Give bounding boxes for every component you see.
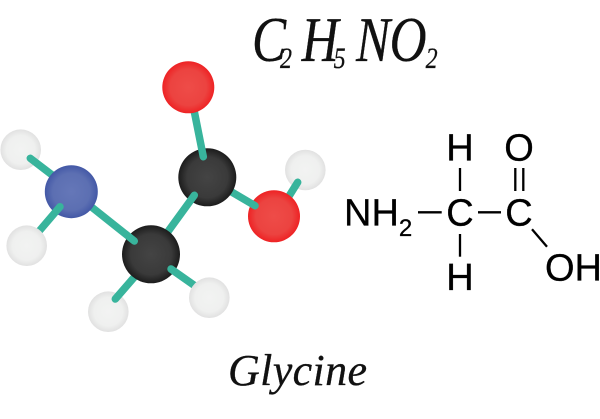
right lower hydrogen with bond: [171, 269, 230, 318]
title: molecular formula: 2: [426, 41, 438, 75]
hydroxyl group: hydrogen and oxygen: [230, 150, 326, 242]
lower hydrogen with bond: [88, 274, 137, 332]
nitrogen-carbon bond: [84, 201, 134, 241]
title: molecular formula: 2: [280, 41, 292, 75]
structural formula: [344, 128, 600, 299]
lower left hydrogen with bond: [6, 207, 60, 266]
upper left hydrogen with bond: [0, 129, 60, 181]
NH2 group: NH: [344, 193, 399, 235]
upper hydrogen label: H: [446, 128, 474, 170]
carboxyl carbon atom: [178, 148, 236, 206]
title: molecular formula: C: [252, 4, 287, 75]
alpha carbon label: C: [446, 193, 474, 235]
lower hydrogen label: H: [446, 257, 474, 299]
carboxyl carbon label: C: [505, 193, 533, 235]
oxygen label: O: [504, 128, 534, 170]
alpha carbon atom: [122, 225, 180, 283]
title: molecular formula: 5: [334, 41, 346, 75]
carbon-carbon bond: [164, 195, 194, 237]
nitrogen atom: [45, 165, 98, 218]
title: molecular formula: N: [355, 4, 393, 75]
caption: Glycine: Glycine: [228, 346, 367, 395]
title: molecular formula: H: [301, 4, 341, 75]
NH2 group: 2: [399, 215, 412, 242]
title: molecular formula: O: [390, 4, 427, 75]
ball-and-stick model: [0, 61, 326, 332]
title: molecular formula: [252, 4, 438, 75]
bond lines: [418, 168, 547, 257]
carbonyl oxygen with bond: [162, 61, 214, 157]
